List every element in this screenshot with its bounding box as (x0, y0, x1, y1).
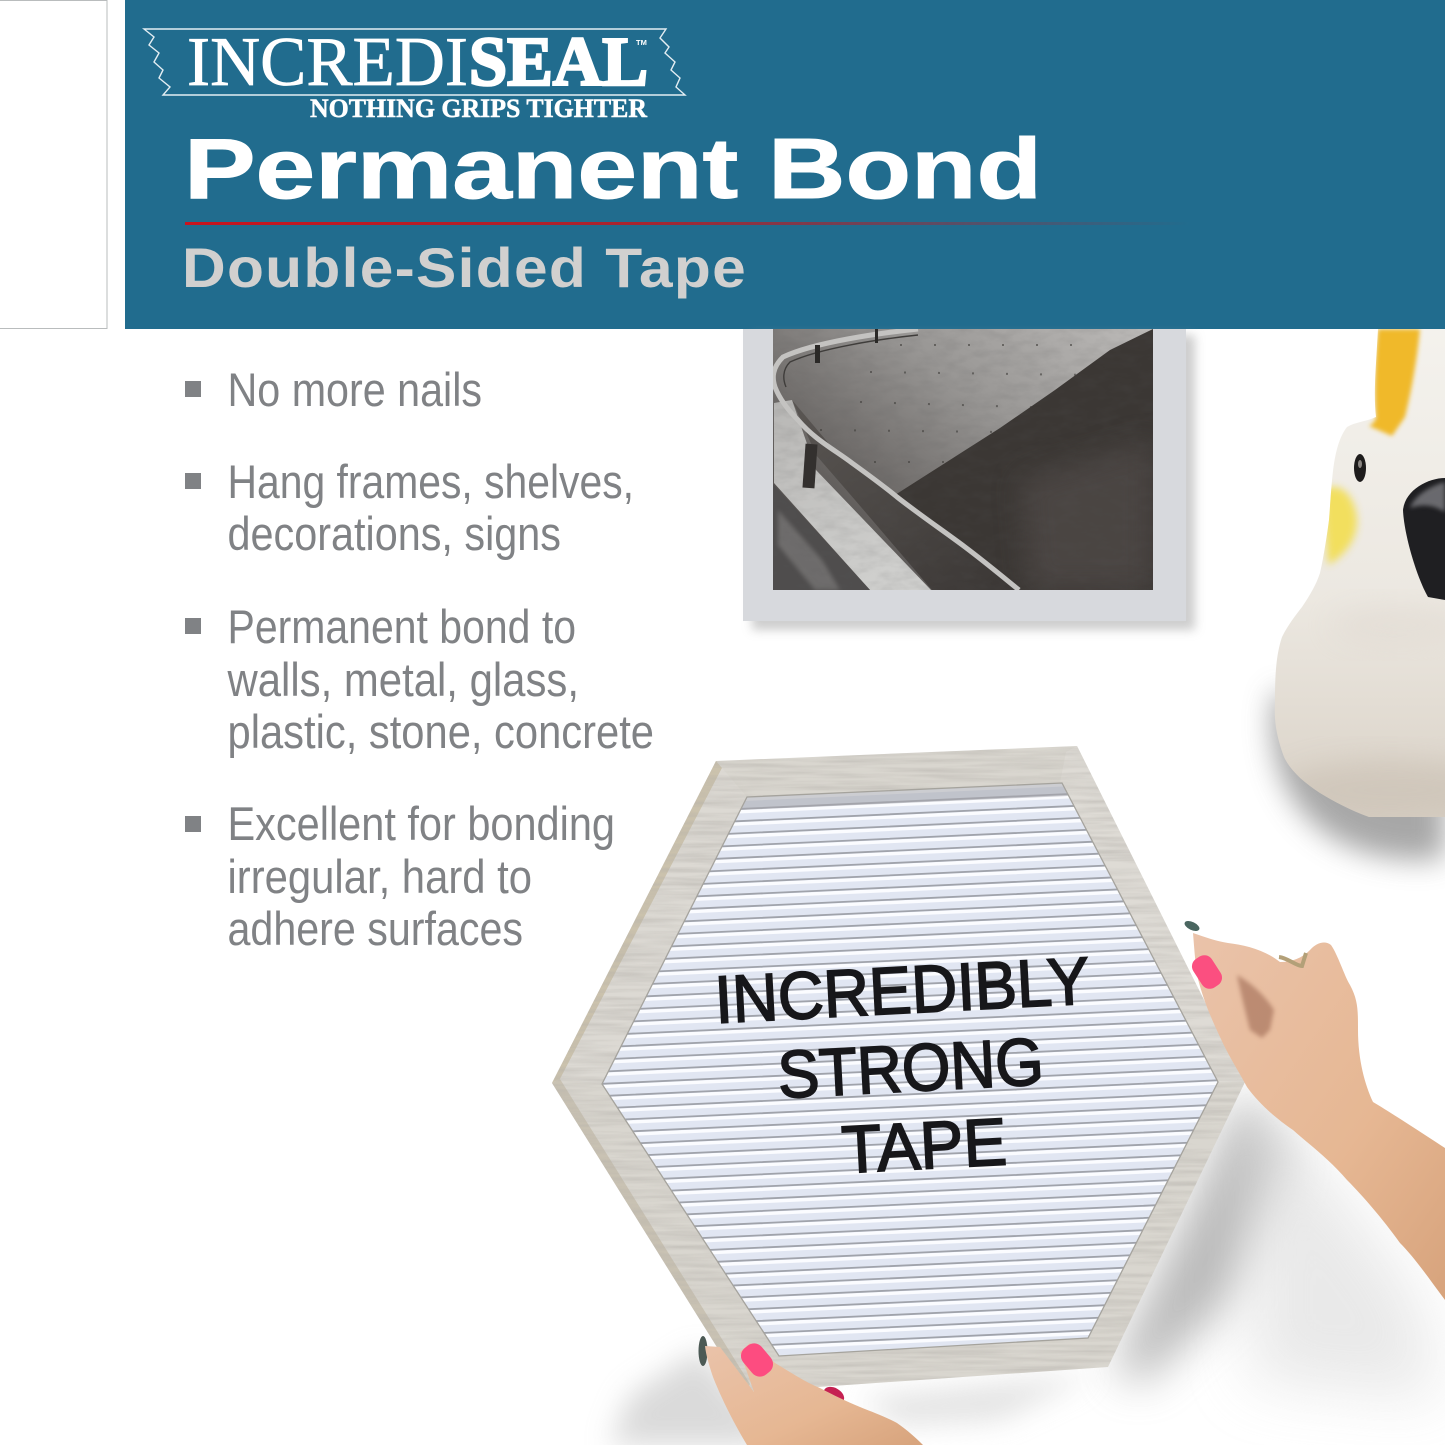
frame shadow (752, 335, 1195, 630)
logo tagline: NOTHING GRIPS TIGHTER (310, 94, 647, 123)
subtitle: Double-Sided Tape (182, 236, 747, 299)
right hand holding board (1183, 919, 1445, 1300)
bird belly shading (1300, 329, 1445, 816)
bullet: excellent for bonding: adhere surfaces (228, 902, 523, 955)
dark fingernail (698, 1336, 708, 1366)
logo tape outline (144, 29, 685, 95)
bullet list (185, 363, 654, 955)
slat top shadow (740, 783, 1068, 810)
bullet: permanent bond: Permanent bond to (228, 600, 576, 653)
logo wordmark: INCREDI (187, 24, 468, 101)
board lettering (713, 943, 1091, 1188)
bullet: hang frames: Hang frames, shelves, (228, 455, 634, 508)
pink nail (1189, 952, 1225, 992)
hand (705, 1343, 923, 1445)
hand and arm (1193, 933, 1445, 1300)
dark fingernail (1183, 919, 1201, 933)
framed photo (743, 329, 1195, 630)
bullet: permanent bond: walls, metal, glass, (227, 653, 579, 706)
logo: IncrediSeal (144, 24, 685, 123)
pink nail (737, 1339, 777, 1381)
wood grain texture (540, 740, 1260, 1400)
bullet: permanent bond: plastic, stone, concrete (228, 705, 654, 758)
logo: IncrediSeal: SEAL (469, 24, 648, 101)
board lettering: STRONG (776, 1024, 1045, 1113)
bullet: excellent for bonding (185, 797, 615, 955)
bird eye (1354, 454, 1366, 482)
ring (1279, 953, 1306, 966)
red divider line (185, 222, 1190, 225)
bullet: hang frames: decorations, signs (228, 507, 561, 560)
frame outer left edge (552, 761, 722, 1083)
finger crease (1237, 975, 1274, 1038)
architecture photograph (773, 329, 1153, 590)
blank box left of header (0, 0, 107, 328)
bullet: permanent bond (185, 600, 654, 758)
board lettering: TAPE (840, 1104, 1009, 1188)
bird beak (1403, 478, 1445, 600)
title: Permanent Bond (184, 122, 1042, 217)
bullet: excellent for bonding: irregular, hard to (228, 850, 532, 903)
bullet: hang frames (185, 455, 634, 560)
bird cheek (1322, 487, 1357, 565)
frame shaded bands (1060, 746, 1245, 1082)
letter board (540, 740, 1260, 1400)
soft shadows under board and arm (610, 1090, 1440, 1445)
bullet: no more nails: No more nails (228, 363, 482, 416)
bird crest (1369, 329, 1420, 436)
header banner (125, 0, 1445, 329)
bullet: excellent for bonding: Excellent for bonding (228, 797, 615, 850)
bird body (1275, 329, 1445, 817)
logo: IncrediSeal: TM (636, 38, 647, 47)
bird shadow (1272, 690, 1445, 860)
cockatoo figurine (1272, 329, 1445, 860)
left hand holding board (698, 1336, 923, 1445)
board lettering: INCREDIBLY (713, 943, 1091, 1038)
board frame (552, 746, 1245, 1392)
frame inner edge (602, 783, 1218, 1356)
back pink nail (821, 1383, 847, 1407)
concrete tie holes (820, 345, 1100, 462)
board slats (602, 784, 1218, 1356)
